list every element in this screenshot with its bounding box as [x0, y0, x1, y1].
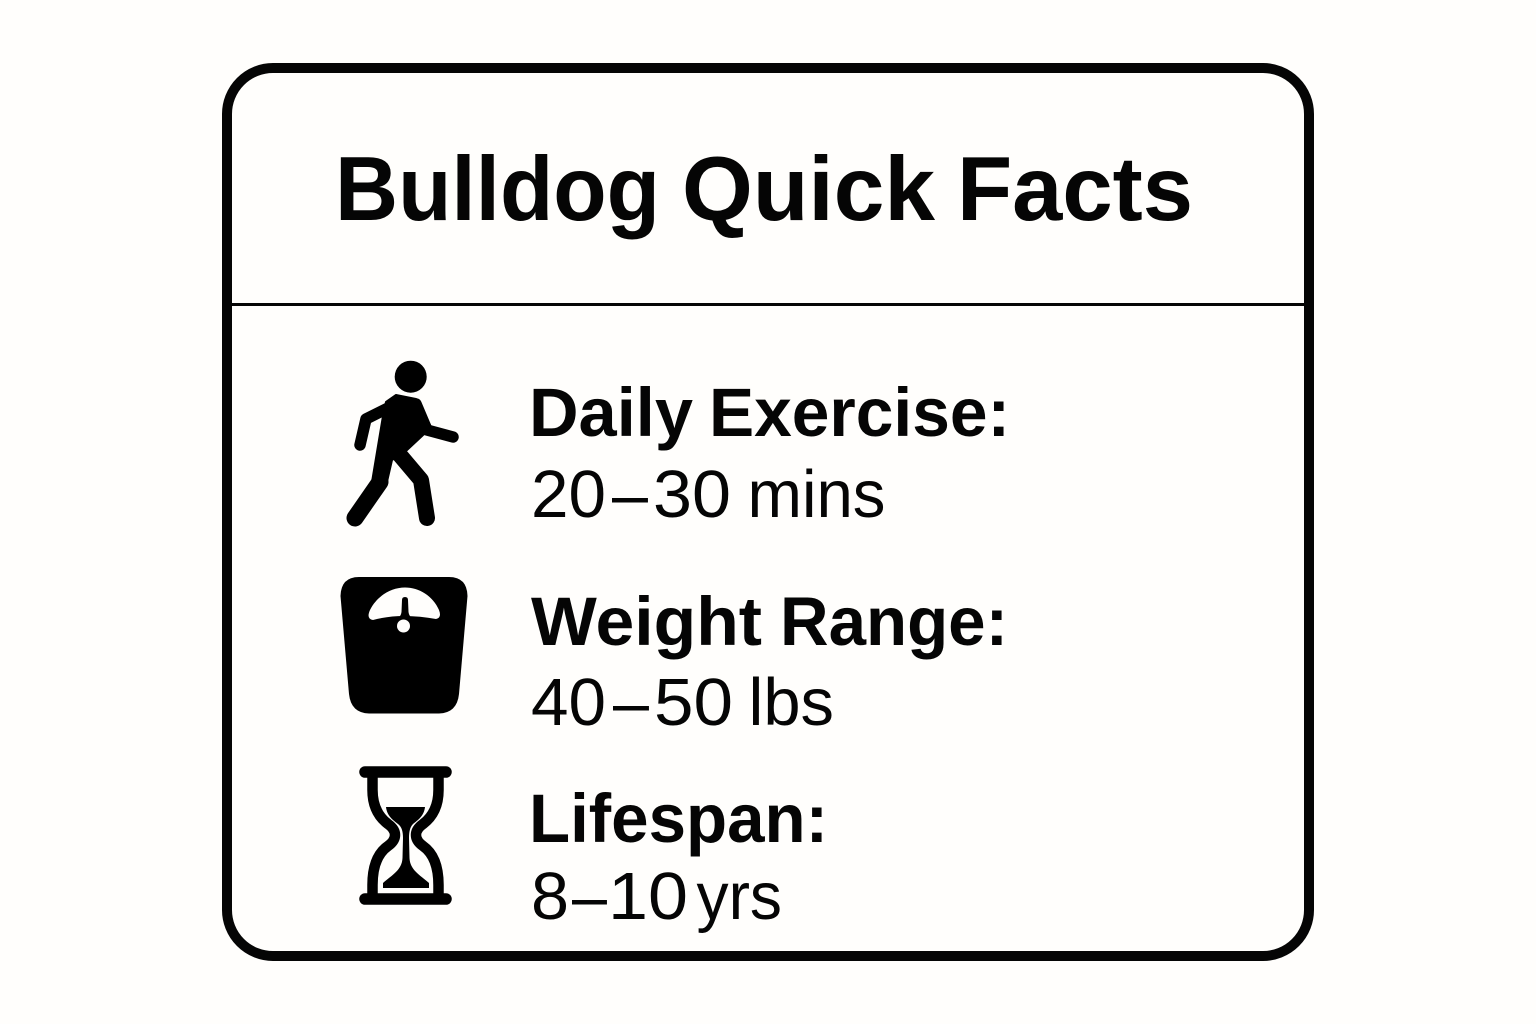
weight value: 40: [531, 665, 606, 740]
lifespan value: 10: [608, 859, 688, 934]
lifespan value: –: [572, 859, 608, 934]
exercise value: –: [612, 457, 649, 532]
lifespan value: 8: [531, 859, 569, 934]
exercise value: mins: [748, 457, 886, 532]
lifespan label: Lifespan:: [529, 780, 828, 857]
exercise value: 20: [531, 457, 606, 532]
weight value: –: [613, 665, 650, 740]
weight label: Weight: [531, 583, 762, 660]
icon: hourglass: [365, 772, 446, 899]
icon: bathroom scale: [340, 577, 468, 714]
row: weight range: [340, 577, 1008, 740]
title: Bulldog: [335, 139, 660, 240]
weight value: 50: [654, 665, 733, 740]
icon: walking person: [355, 361, 453, 518]
weight label: Range:: [780, 583, 1008, 660]
weight value: lbs: [748, 665, 834, 740]
exercise label: Daily: [529, 374, 693, 451]
title: Facts: [957, 139, 1193, 240]
lifespan value: yrs: [696, 859, 782, 934]
exercise label: Exercise:: [709, 374, 1010, 451]
row: daily exercise: [355, 361, 1010, 532]
exercise value: 30: [653, 457, 731, 532]
row: lifespan: [365, 772, 828, 934]
panel: bulldog quick facts card: [227, 68, 1309, 956]
title: Quick: [682, 139, 935, 240]
